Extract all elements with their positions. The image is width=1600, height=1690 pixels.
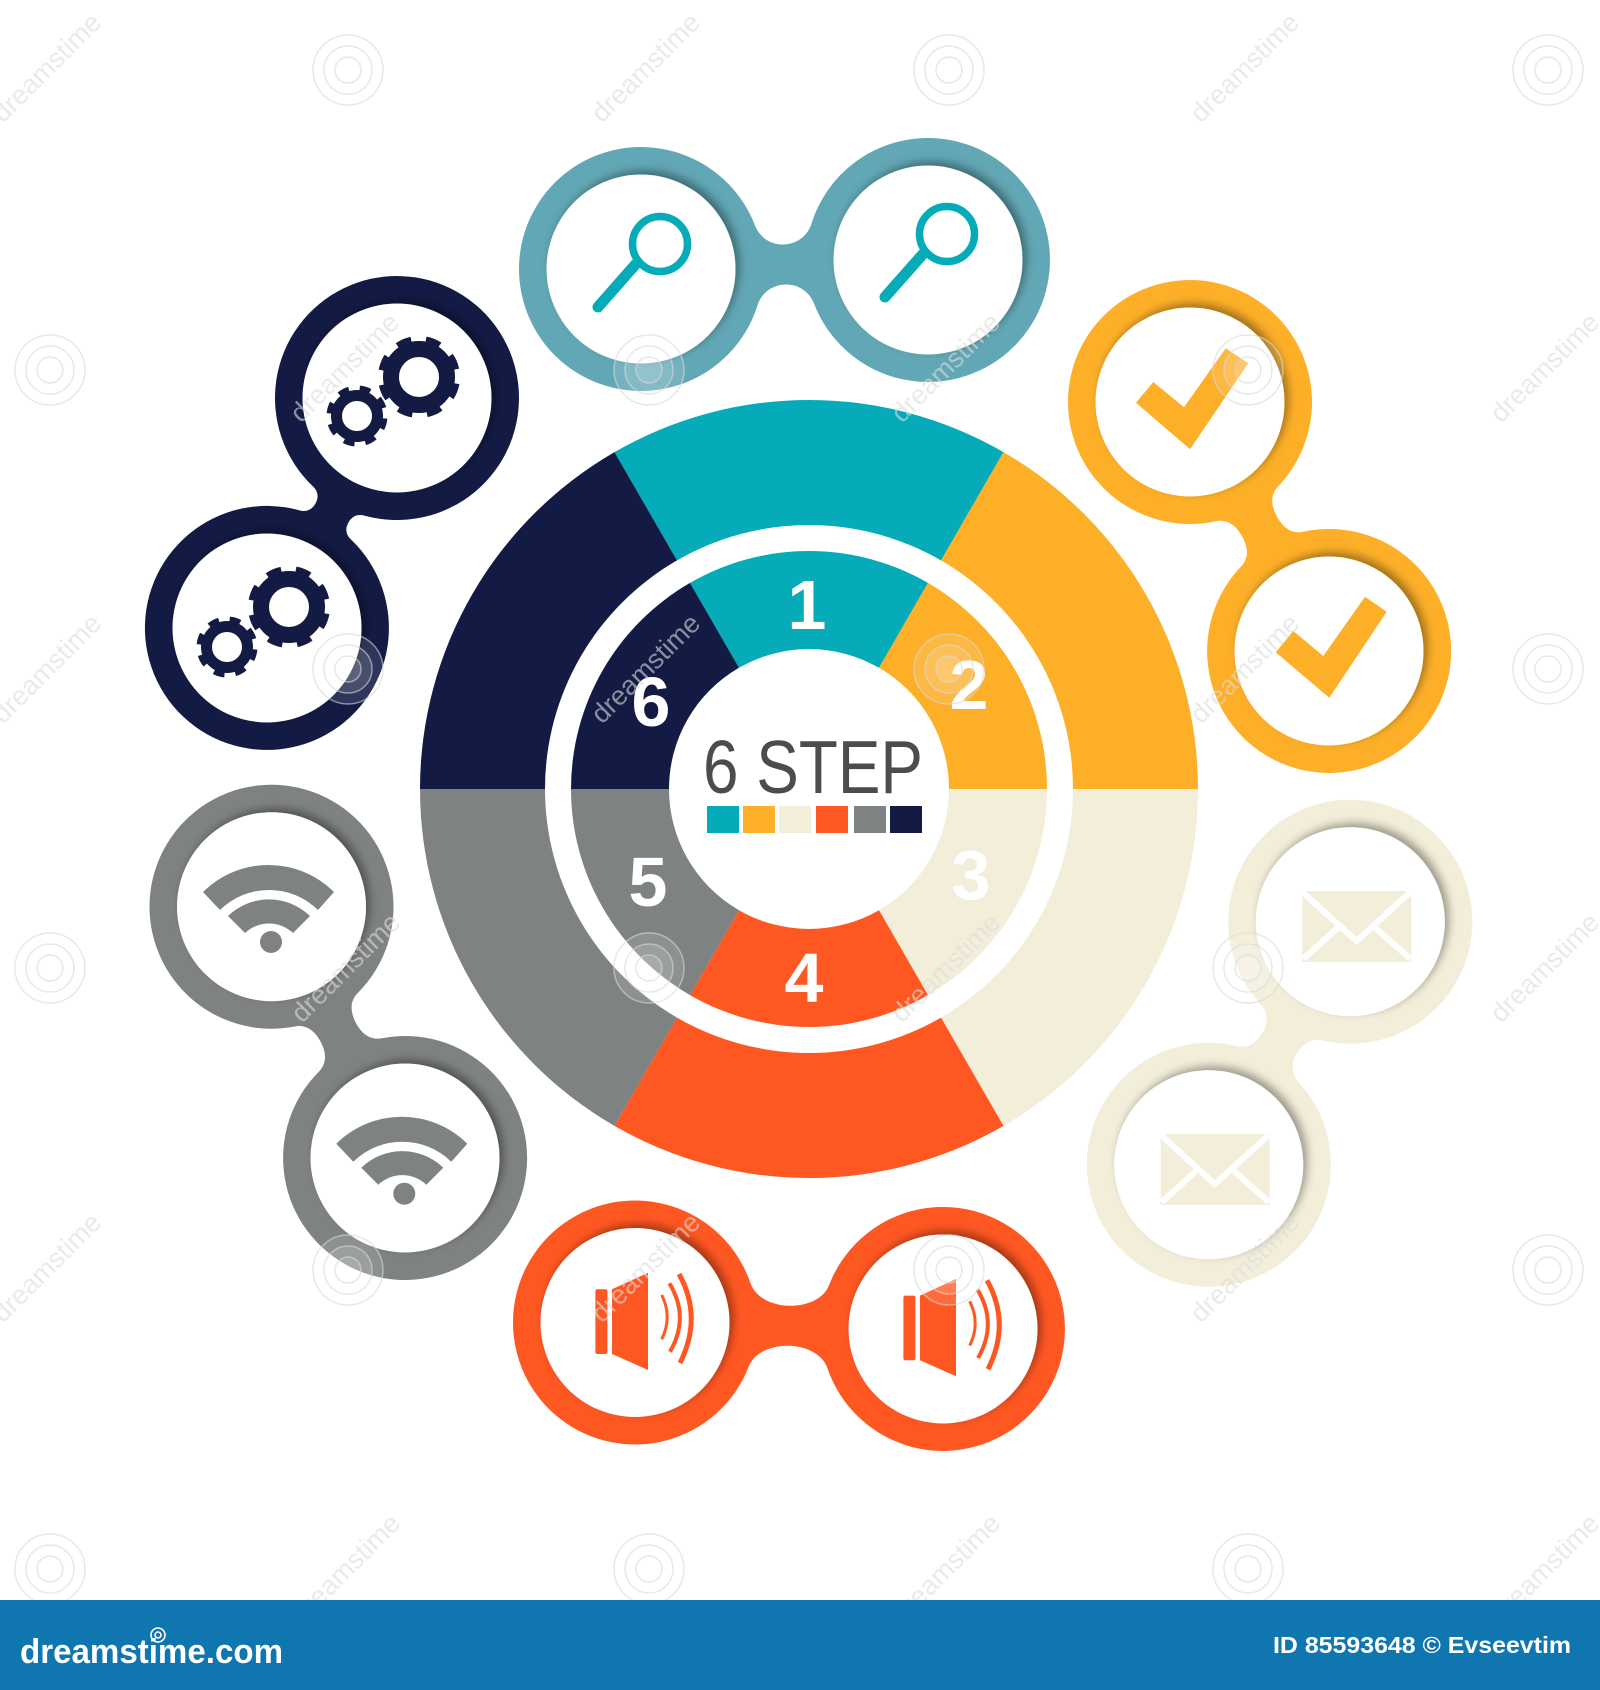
- chart: outer donut ring: [420, 400, 1198, 1178]
- ring connector shape: [515, 134, 1054, 395]
- panel: wifi rings: [107, 742, 570, 1323]
- upper opening: [1256, 827, 1445, 1016]
- icon: wifi lower: [336, 1117, 467, 1205]
- number 4: 4: [785, 939, 824, 1017]
- left opening: [540, 1228, 730, 1417]
- lower opening: [1114, 1070, 1303, 1259]
- icon: check lower: [1276, 597, 1387, 698]
- watermark layer: dreamstime: [1184, 1207, 1305, 1328]
- icon: footer logo spiral: [151, 1628, 165, 1642]
- icon: gears lower: [197, 563, 333, 677]
- title: 6 STEP: [703, 725, 923, 809]
- segment 1 outer: [614, 400, 1004, 560]
- swatch orange: [743, 806, 775, 833]
- icon: speaker right: [903, 1279, 999, 1376]
- segment 4 outer: [614, 1018, 1004, 1178]
- ring connector shape: [1024, 236, 1495, 817]
- swatch teal: [707, 806, 739, 833]
- segment 6 outer: [420, 452, 677, 789]
- watermark layer: dreamstime: [284, 307, 405, 428]
- icon: magnifier left: [598, 216, 688, 307]
- watermark layer: dreamstime: [585, 7, 706, 128]
- right opening: [834, 166, 1022, 354]
- watermark layer: dreamstime: [285, 907, 406, 1028]
- ring connector shape: [101, 232, 563, 794]
- panel: mail rings: [1042, 755, 1517, 1332]
- ring connector shape: [510, 1198, 1067, 1453]
- icon: envelope lower: [1161, 1134, 1270, 1205]
- footer logo text: dreamstime.com: [20, 1633, 283, 1671]
- watermark layer: dreamstime: [1184, 7, 1305, 128]
- lower opening: [172, 534, 362, 722]
- panel: search rings: [515, 134, 1054, 395]
- number 1: 1: [788, 566, 826, 644]
- segment 2 inner: [879, 583, 1047, 789]
- segment 1 inner: [690, 551, 928, 668]
- segment 3 outer: [941, 789, 1198, 1126]
- icon: magnifier right: [885, 206, 974, 297]
- step numbers: [629, 566, 990, 1017]
- legend swatches: [707, 806, 922, 833]
- swatch navy: [890, 806, 922, 833]
- segment 3 inner: [879, 789, 1047, 995]
- ring connector shape: [107, 742, 570, 1323]
- chart: inner donut ring: [571, 551, 1047, 1027]
- icon: check upper: [1136, 348, 1248, 449]
- watermark layer: dreamstime: [1184, 608, 1305, 729]
- icon: envelope upper: [1302, 891, 1411, 962]
- number 5: 5: [629, 843, 667, 921]
- swatch red: [816, 806, 848, 833]
- lower opening: [310, 1064, 500, 1252]
- upper opening: [302, 304, 492, 492]
- swatch gray: [854, 806, 886, 833]
- number 2: 2: [950, 646, 988, 724]
- footer bar: [0, 1600, 1600, 1690]
- panel: speaker rings: [510, 1198, 1067, 1453]
- segment 4 inner: [690, 910, 928, 1027]
- watermark layer: dreamstime: [885, 307, 1006, 428]
- icon: wifi upper: [203, 865, 334, 953]
- upper opening: [177, 812, 366, 1001]
- number 3: 3: [952, 836, 990, 914]
- swatch cream: [779, 806, 811, 833]
- number 6: 6: [632, 663, 670, 741]
- ring connector shape: [1042, 755, 1517, 1332]
- upper opening: [1096, 308, 1284, 496]
- segment 5 inner: [571, 789, 739, 995]
- right opening: [848, 1234, 1038, 1424]
- watermark layer: dreamstime: [285, 1508, 406, 1629]
- left opening: [546, 174, 736, 364]
- footer credit: ID 85593648 © Evseevtim: [1273, 1632, 1571, 1658]
- segment 6 inner: [571, 583, 739, 789]
- icon: gears upper: [327, 333, 463, 446]
- watermark layer: dreamstime: [585, 1207, 706, 1328]
- watermark layer: dreamstime: [885, 1508, 1006, 1629]
- lower opening: [1234, 556, 1424, 746]
- watermark layer: dreamstime: [585, 608, 706, 729]
- watermark layer: dreamstime: [885, 907, 1006, 1028]
- segment 2 outer: [941, 452, 1198, 789]
- panel: gear rings: [101, 232, 563, 794]
- icon: speaker left: [595, 1273, 691, 1370]
- panel: check rings: [1024, 236, 1495, 817]
- segment 5 outer: [420, 789, 677, 1126]
